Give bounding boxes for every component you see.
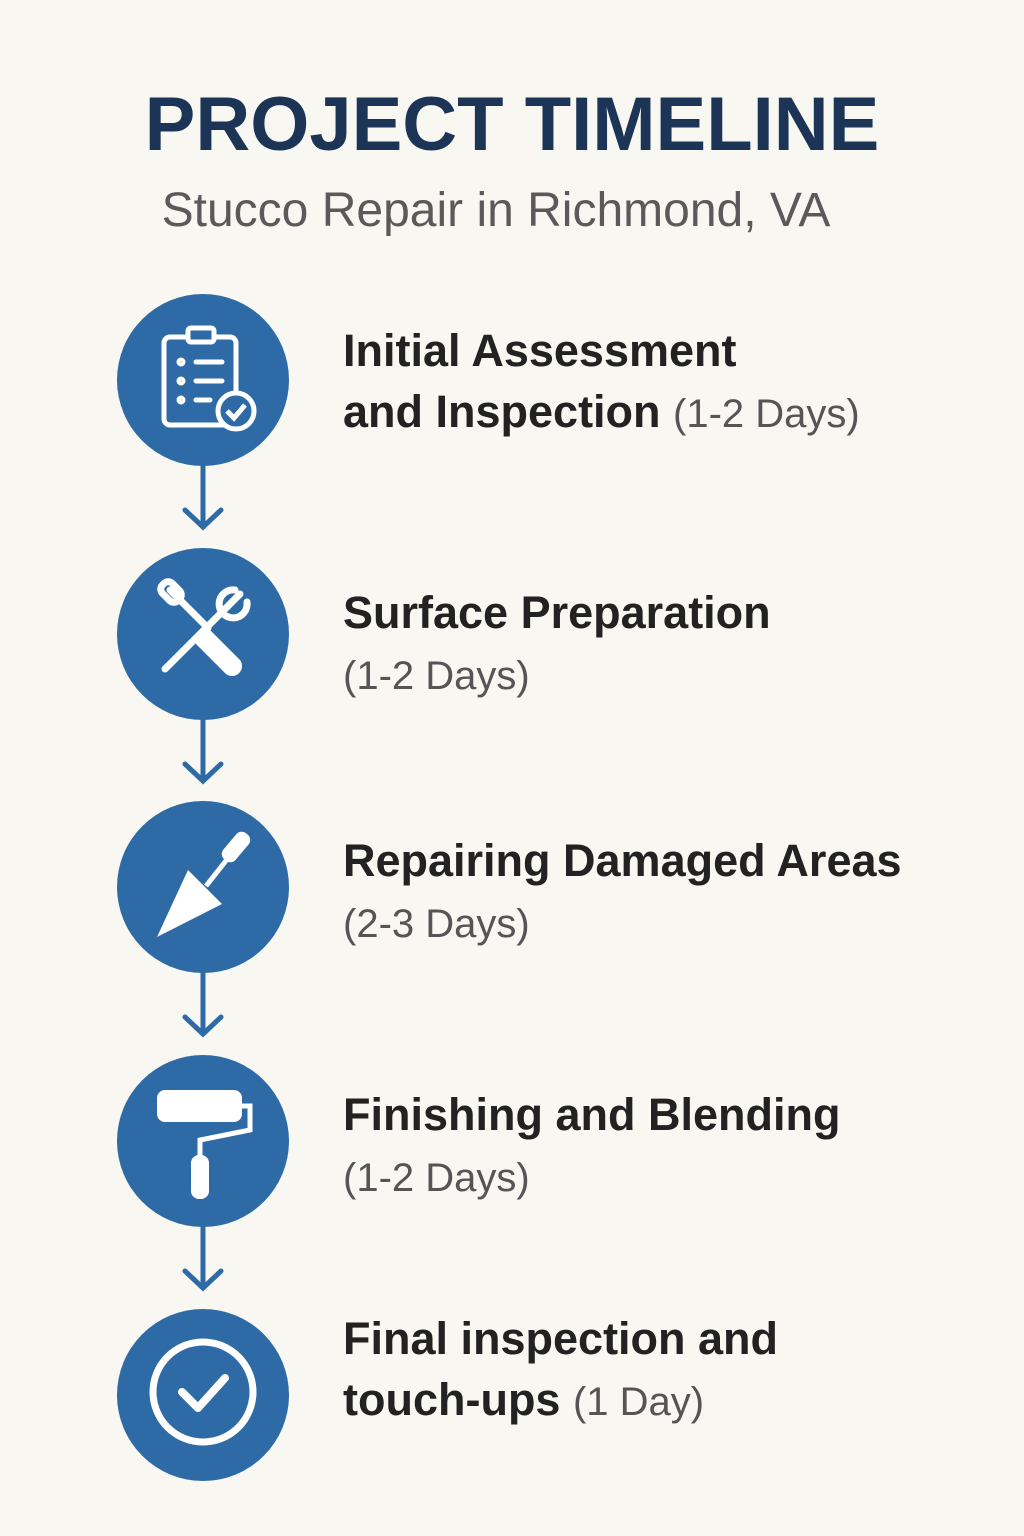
step 5 text: touch-ups (1 Day) — [343, 1374, 704, 1425]
icon: check circle — [117, 1309, 289, 1481]
step 4 text: Finishing and Blending — [343, 1089, 840, 1140]
step 1 text: Initial Assessment — [343, 325, 736, 376]
step 2 text: Surface Preparation — [343, 587, 771, 638]
step 2 text — [343, 587, 771, 698]
arrow 1 — [185, 466, 221, 527]
icon: clipboard — [117, 294, 289, 466]
arrow 3 — [185, 973, 221, 1034]
step 4 text — [343, 1089, 840, 1200]
icon: paint roller — [117, 1055, 289, 1227]
step 5 text — [343, 1313, 778, 1425]
step 5 text: Final inspection and — [343, 1313, 778, 1364]
arrow 4 — [185, 1227, 221, 1288]
step 1 text — [343, 325, 860, 437]
arrow 2 — [185, 720, 221, 781]
step 4 text: (1-2 Days) — [343, 1156, 530, 1200]
icon: trowel — [117, 801, 289, 973]
step 3 text — [343, 835, 902, 946]
icon: tools — [117, 548, 289, 720]
subtitle: Stucco Repair in Richmond, VA — [162, 184, 830, 237]
step 3 text: Repairing Damaged Areas — [343, 835, 902, 886]
title: PROJECT TIMELINE — [145, 82, 879, 167]
step 3 text: (2-3 Days) — [343, 902, 530, 946]
step 1 text: and Inspection (1-2 Days) — [343, 386, 860, 437]
step 2 text: (1-2 Days) — [343, 654, 530, 698]
